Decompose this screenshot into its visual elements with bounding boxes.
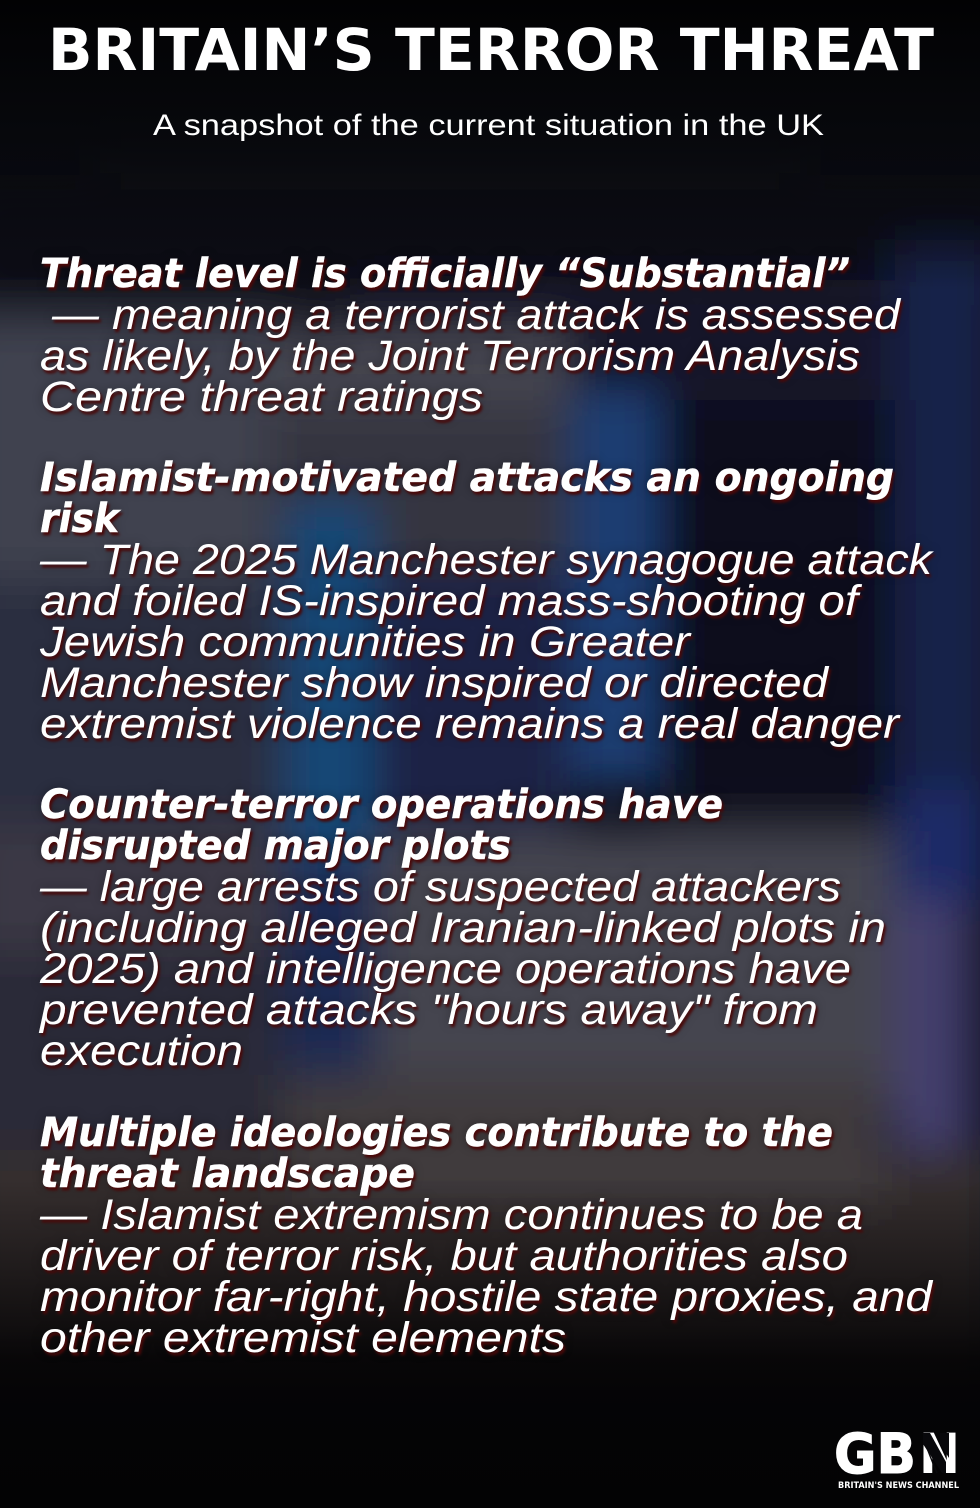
text block: Islamist-motivated attacks: Manchester show inspired or directed: [40, 659, 830, 707]
logo: GBN: [834, 1422, 960, 1491]
text block: multiple ideologies: Multiple ideologies contribute to the: [40, 1110, 833, 1156]
text block: counter-terror operations: disrupted major plots: [40, 823, 511, 869]
text block: Islamist-motivated attacks: Islamist-motivated attacks an ongoing: [40, 455, 894, 501]
text block: threat level: Threat level is officially “Substantial”: [40, 251, 850, 297]
text block: multiple ideologies: [39, 1110, 934, 1362]
text block: counter-terror operations: 2025) and intelligence operations have: [39, 945, 851, 993]
text block: counter-terror operations: execution: [40, 1027, 243, 1075]
text block: multiple ideologies: other extremist elements: [40, 1314, 566, 1362]
text block: Islamist-motivated attacks: extremist violence remains a real danger: [40, 700, 901, 748]
title: BRITAIN’S TERROR THREAT: [48, 16, 934, 84]
text block: Islamist-motivated attacks: and foiled IS-inspired mass-shooting of: [40, 577, 862, 625]
text block: multiple ideologies: threat landscape: [40, 1151, 415, 1197]
text block: threat level: [40, 251, 902, 421]
text block: multiple ideologies: — Islamist extremism continues to be a: [39, 1191, 863, 1239]
logo: GBN: BRITAIN'S NEWS CHANNEL: [838, 1481, 960, 1491]
text block: counter-terror operations: prevented attacks "hours away" from: [38, 986, 818, 1034]
text block: counter-terror operations: — large arrests of suspected attackers: [39, 863, 841, 911]
text block: Islamist-motivated attacks: Jewish communities in Greater: [39, 618, 692, 666]
text block: Islamist-motivated attacks: [39, 455, 935, 748]
text block: multiple ideologies: driver of terror risk, but authorities also: [40, 1232, 848, 1280]
text block: counter-terror operations: [38, 782, 886, 1075]
logo: GBN: GB: [834, 1422, 916, 1486]
logo: GBN: N: [919, 1422, 960, 1486]
text block: threat level: as likely, by the Joint Terrorism Analysis: [40, 332, 860, 380]
text block: counter-terror operations: (including alleged Iranian-linked plots in: [40, 904, 886, 952]
text block: counter-terror operations: Counter-terror operations have: [40, 782, 723, 828]
text block: threat level: Centre threat ratings: [40, 373, 483, 421]
text block: Islamist-motivated attacks: risk: [40, 496, 121, 542]
text block: threat level: — meaning a terrorist attack is assessed: [51, 291, 902, 339]
subtitle: A snapshot of the current situation in the UK: [153, 109, 824, 142]
text block: Islamist-motivated attacks: — The 2025 Manchester synagogue attack: [39, 536, 935, 584]
text block: multiple ideologies: monitor far-right, hostile state proxies, and: [40, 1273, 934, 1321]
